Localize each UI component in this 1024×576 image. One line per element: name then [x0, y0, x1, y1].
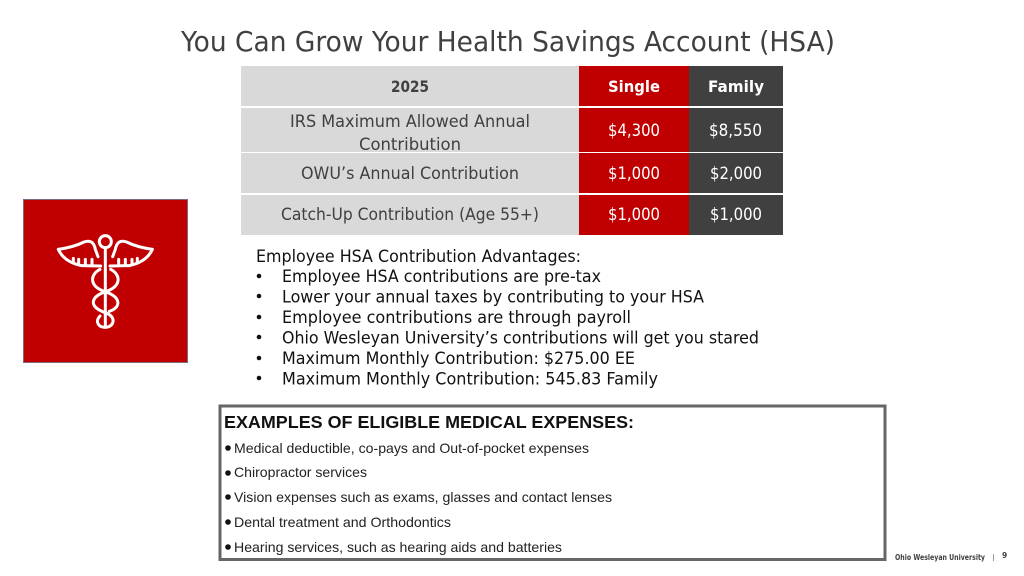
table: 2025 contribution limits: $8,550 [709, 121, 762, 140]
text block: employee HSA contribution advantages: Maximum Monthly Contribution: 545.83 Family [282, 370, 658, 388]
panel: examples of eligible medical expenses: EXAMPLES OF ELIGIBLE MEDICAL EXPENSES: [224, 412, 634, 432]
table: 2025 contribution limits [241, 66, 783, 235]
table: 2025 contribution limits: $2,000 [710, 164, 762, 183]
table: 2025 contribution limits: OWU’s Annual Contribution [301, 164, 519, 183]
text block: employee HSA contribution advantages [256, 247, 759, 388]
text block: employee HSA contribution advantages: Employee contributions are through payroll [282, 308, 631, 327]
icon: red square with caduceus [24, 200, 188, 362]
title: You Can Grow Your Health Savings Account (HSA) [180, 25, 835, 58]
footer: university name and page number: 9 [1002, 551, 1007, 560]
panel: examples of eligible medical expenses: Hearing services, such as hearing aids and batteries [234, 539, 562, 555]
table: 2025 contribution limits: $1,000 [608, 164, 660, 183]
text block: employee HSA contribution advantages: Ohio Wesleyan University’s contributions will get you stared [282, 328, 759, 348]
panel: examples of eligible medical expenses: Medical deductible, co-pays and Out-of-pocket expenses [234, 440, 589, 456]
text block: employee HSA contribution advantages: Employee HSA Contribution Advantages: [256, 247, 581, 266]
text block: employee HSA contribution advantages: Maximum Monthly Contribution: $275.00 EE [282, 349, 635, 368]
table: 2025 contribution limits: 2025 [391, 77, 429, 96]
panel: examples of eligible medical expenses [220, 406, 885, 560]
footer: university name and page number: Ohio Wesleyan University [895, 553, 985, 562]
table: 2025 contribution limits: Catch-Up Contribution (Age 55+) [281, 205, 539, 224]
panel: examples of eligible medical expenses: Vision expenses such as exams, glasses and contact lenses [234, 489, 612, 505]
table: 2025 contribution limits: Contribution [359, 135, 461, 154]
table: 2025 contribution limits: $1,000 [710, 205, 762, 224]
table: 2025 contribution limits: Single [608, 77, 660, 96]
text block: employee HSA contribution advantages: Employee HSA contributions are pre-tax [282, 267, 601, 286]
panel: examples of eligible medical expenses: Dental treatment and Orthodontics [234, 514, 451, 530]
text block: employee HSA contribution advantages: Lower your annual taxes by contributing to your HSA [282, 288, 705, 306]
table: 2025 contribution limits: IRS Maximum Allowed Annual [290, 112, 530, 131]
table: 2025 contribution limits: $1,000 [608, 205, 660, 224]
panel: examples of eligible medical expenses: Chiropractor services [234, 464, 367, 480]
table: 2025 contribution limits: $4,300 [608, 121, 660, 140]
table: 2025 contribution limits: Family [708, 77, 765, 96]
